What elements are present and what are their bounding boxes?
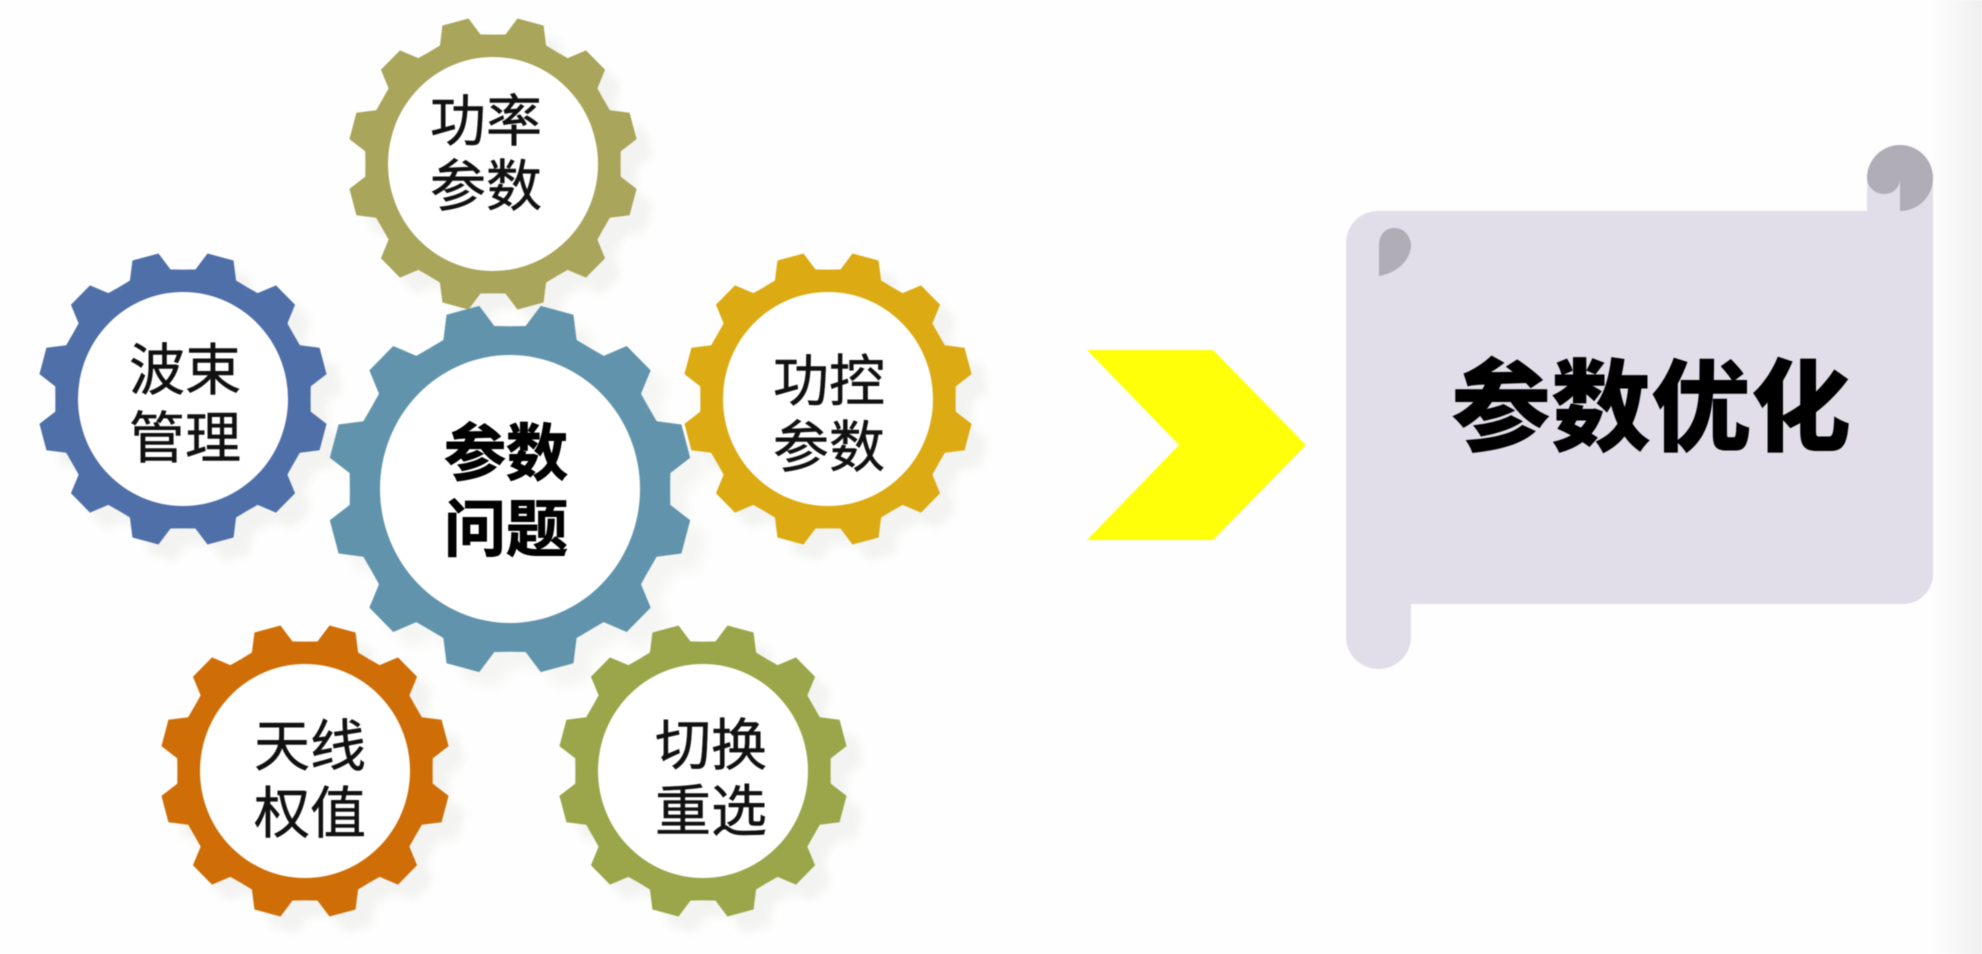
gear: power parameters: [344, 13, 658, 331]
gear: central parameter problems: 参数: [444, 420, 568, 489]
gear: power control parameters: [679, 248, 993, 566]
gear: antenna weights: [156, 620, 470, 938]
heading: parameter optimization: 参数优化: [1451, 353, 1851, 465]
gear: antenna weights: 天线: [254, 715, 366, 778]
gear: handover and reselection: 切换: [655, 714, 767, 777]
panel: scroll: [1346, 145, 1933, 669]
icon: top right scroll curl: [1867, 145, 1933, 211]
gear: power parameters: 参数: [430, 155, 542, 218]
gear: antenna weights: 权值: [254, 782, 366, 845]
gear: handover and reselection: 重选: [655, 780, 767, 843]
arrow: yellow chevron: [1087, 350, 1306, 540]
gear: power control parameters: 功控: [773, 350, 885, 413]
gear: handover and reselection: [554, 620, 868, 938]
gear: beam management: 管理: [129, 407, 241, 470]
gear: central parameter problems: [323, 299, 697, 679]
gear: beam management: 波束: [129, 339, 241, 402]
gear: power parameters: 功率: [430, 90, 542, 153]
gear: beam management: [34, 248, 348, 566]
icon: left scroll curl: [1379, 228, 1411, 276]
gear: central parameter problems: 问题: [444, 496, 568, 565]
gear: power control parameters: 参数: [773, 416, 885, 479]
